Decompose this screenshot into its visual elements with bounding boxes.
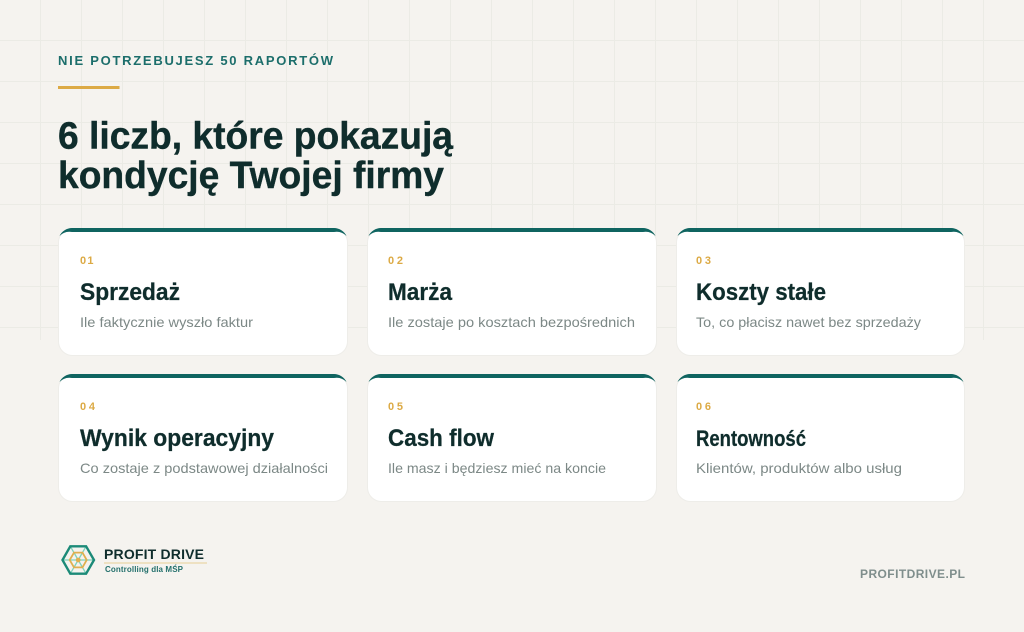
logo wordmark: PROFIT DRIVE	[104, 546, 204, 562]
card 6	[676, 374, 964, 502]
card 5: 05	[388, 401, 403, 413]
card 3	[676, 228, 964, 356]
card 4: 04	[80, 401, 96, 413]
card 2: Ile zostaje po kosztach bezpośrednich	[388, 314, 635, 330]
card 3: 03	[696, 255, 711, 267]
card 5	[368, 374, 656, 502]
title	[58, 116, 454, 197]
card 5: Ile masz i będziesz mieć na koncie	[388, 460, 606, 476]
card 1: Ile faktycznie wyszło faktur	[80, 314, 253, 330]
card 4: Wynik operacyjny	[80, 425, 275, 452]
card 6: 06	[696, 401, 711, 413]
title: 6 liczb, które pokazują	[58, 116, 454, 158]
title: kondycję Twojej firmy	[58, 155, 444, 197]
logo tagline: Controlling dla MŚP	[105, 565, 184, 574]
card 1: Sprzedaż	[80, 279, 180, 306]
card 3: To, co płacisz nawet bez sprzedaży	[696, 314, 921, 330]
card 2	[368, 228, 656, 356]
card 2: 02	[388, 255, 403, 267]
card 2: Marża	[388, 279, 453, 306]
eyebrow: NIE POTRZEBUJESZ 50 RAPORTÓW	[58, 53, 334, 68]
card 1	[58, 228, 348, 356]
icon: logo hexagon	[62, 546, 94, 574]
website: PROFITDRIVE.PL	[860, 567, 965, 581]
card 6: Rentowność	[696, 426, 806, 451]
card 3: Koszty stałe	[696, 279, 826, 306]
card 4	[58, 374, 348, 502]
logo rule	[104, 562, 207, 564]
card 1: 01	[80, 255, 94, 267]
card 5: Cash flow	[388, 425, 494, 452]
card 6: Klientów, produktów albo usług	[696, 460, 902, 476]
card 4: Co zostaje z podstawowej działalności	[80, 460, 328, 476]
accent rule	[58, 86, 120, 89]
